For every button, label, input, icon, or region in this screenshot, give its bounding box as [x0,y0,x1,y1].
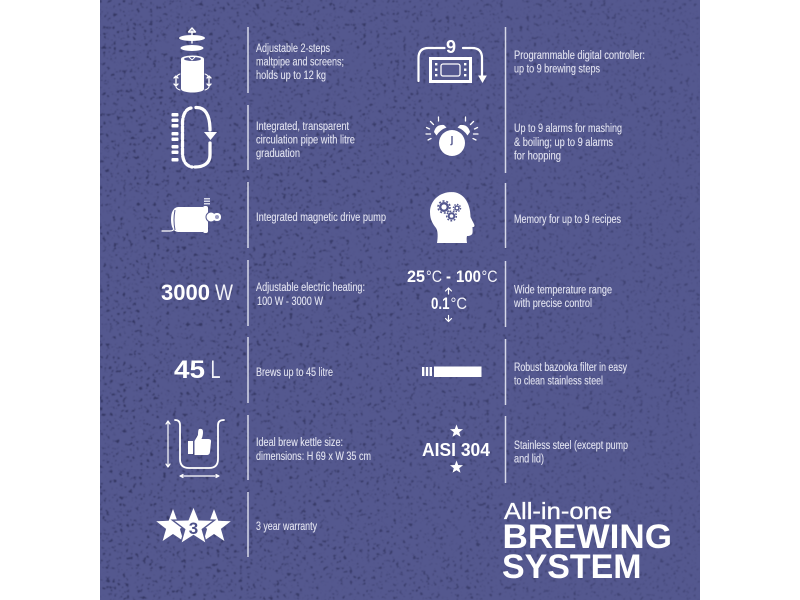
icon: AISI 304 with stars [422,424,490,473]
text: heating description [256,280,365,308]
text: memory description: Memory for up to 9 recipes [514,212,621,226]
panel: textured blue background [100,0,700,600]
text: temperature description: Wide temperature range [514,282,612,296]
title: SYSTEM [502,548,642,586]
text: steel description: and lid) [514,452,544,466]
text: alarms description [514,121,622,162]
icon: bazooka filter [422,366,482,377]
icon: AISI 304 with stars: AISI 304 [422,440,490,460]
text: temperature description: with precise control [513,296,592,310]
text: maltpipe description: maltpipe and screens; [256,54,344,68]
text: filter description: Robust bazooka filter in easy [514,360,628,374]
stat: 3000 W [161,280,233,305]
text: circulation pipe description: circulation pipe with litre [256,132,355,146]
icon: pump [162,198,221,233]
feature: bazooka filter [422,339,628,405]
feature: digital controller [418,27,645,173]
text: controller description: Programmable digital controller: [514,48,645,62]
feature: adjustable maltpipe [174,27,344,93]
feature: temperature range [407,261,612,327]
icon: head with gears [430,192,474,243]
feature: ideal kettle size [166,415,371,480]
text: heating description: Adjustable electric heating: [256,280,365,294]
feature: AISI 304 steel [422,416,628,483]
text: filter description [514,360,628,388]
icon: circulation pipe with graduation [172,107,217,167]
text: alarms description: & boiling; up to 9 alarms [514,135,613,149]
feature: recipe memory [430,183,621,248]
text: circulation pipe description: Integrated, transparent [256,119,349,133]
stat: temperature range and precision: °C [482,267,498,286]
text: temperature description [513,282,612,310]
icon: kettle with thumbs up [166,420,224,478]
text: kettle description: dimensions: H 69 x W 35 cm [256,449,371,463]
text: controller description [514,48,645,76]
text: controller description: up to 9 brewing steps [514,62,600,76]
icon: controller with 9 steps [418,37,486,83]
text: capacity description: Brews up to 45 litre [256,365,333,379]
text: kettle description: Ideal brew kettle size: [256,435,343,449]
icon: three stars with number 3: 3 [189,519,198,538]
stat: temperature range and precision: °C [450,294,467,313]
text: circulation pipe description [256,119,355,160]
icon: maltpipe [174,28,211,92]
stat: 3000 W: W [215,280,233,305]
title [502,498,672,586]
stat: temperature range and precision: 0.1 [431,294,450,313]
text: pump description: Integrated magnetic drive pump [256,210,386,224]
text: filter description: to clean stainless steel [514,374,603,388]
text: alarms description: Up to 9 alarms for mashing [514,121,622,135]
stat: temperature range and precision: 100 [456,267,481,286]
feature: 3000 W heating [161,260,365,326]
icon: three stars with number 3 [156,506,231,544]
stat: 45 L: 45 [174,356,205,384]
stat: temperature range and precision: °C [426,267,442,286]
stat: temperature range and precision: - [446,267,451,286]
title: All-in-one [504,498,612,524]
icon: controller with 9 steps: 9 [446,37,456,57]
text: circulation pipe description: graduation [256,146,300,160]
text: kettle description [256,435,371,463]
stat: temperature range and precision: 25 [407,267,425,286]
text: steel description [514,438,628,466]
feature: alarms [426,117,622,162]
feature: magnetic drive pump [162,182,386,248]
stat: 3000 W: 3000 [161,280,210,305]
feature: circulation pipe [172,105,355,170]
stat: temperature range and precision [407,267,498,322]
icon: alarm clock [426,117,478,156]
text: maltpipe description [256,41,344,82]
title: BREWING [502,518,672,556]
stat: 45 L [174,356,221,384]
text: maltpipe description: holds up to 12 kg [256,68,326,82]
feature: 45 L capacity [174,337,333,403]
text: maltpipe description: Adjustable 2-steps [256,41,330,55]
stat: 45 L: L [210,356,221,384]
feature: 3 year warranty [156,492,318,557]
text: warranty description: 3 year warranty [256,519,318,533]
text: alarms description: for hopping [514,148,561,162]
text: steel description: Stainless steel (except pump [514,438,628,452]
text: heating description: 100 W - 3000 W [257,294,323,308]
